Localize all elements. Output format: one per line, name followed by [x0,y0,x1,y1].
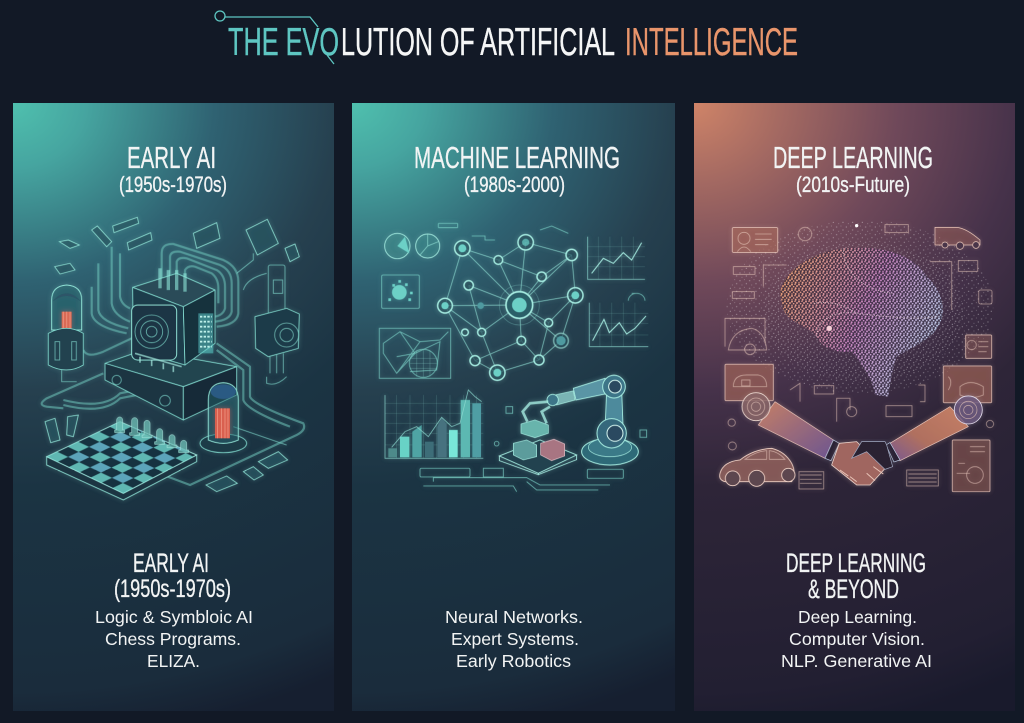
text block: deep learning summary: Computer Vision. [789,629,925,649]
heading: deep learning: (2010s-Future) [796,172,910,197]
icon: car [720,448,795,486]
icon: handshake [832,442,893,485]
robot arm: left [742,393,839,461]
heading: deep learning [773,140,933,197]
icon: van [935,227,980,249]
illustration: neural network, charts and robot arm [379,223,648,492]
panel: deep learning [694,103,1015,711]
text block: deep learning summary: NLP. Generative AI [781,651,932,671]
heading: early AI: (1950s-1970s) [119,172,227,197]
base plinth [105,350,237,420]
illustration: isometric vintage computer with chessboard [42,217,304,500]
line chart: bottom [589,293,648,347]
text block: deep learning summary: & BEYOND [808,574,899,604]
text block: machine learning summary: Neural Networks. [445,607,583,627]
wires behind the machine [42,244,304,485]
title: LUTION OF ARTIFICIAL [341,21,615,64]
icon: pie charts [385,223,568,259]
panel: machine learning [352,103,675,711]
heading: machine learning: MACHINE LEARNING [414,140,620,175]
text block: early AI summary: Logic & Symbloic AI [95,607,253,627]
title: THE EVO [228,21,339,64]
scattered circuit components [45,217,299,492]
title: INTELLIGENCE [625,21,798,64]
illustration: digital brain and robot handshake [720,220,994,492]
icon: map with polygon mesh [379,328,451,378]
text block: deep learning summary: Deep Learning. [798,607,917,627]
neural network graph [438,235,583,380]
heading: machine learning: (1980s-2000) [464,172,565,197]
icon: sun diagram [382,275,419,308]
title [215,11,798,64]
heading: early AI: EARLY AI [127,140,216,175]
circuit labels below robot [420,407,647,492]
heading: deep learning: DEEP LEARNING [773,140,933,175]
heading: machine learning [414,140,620,197]
particle dust [727,220,993,393]
robot arm: right [886,396,982,462]
text block: early AI summary: (1950s-1970s) [114,575,231,603]
text block: machine learning summary: Expert Systems. [451,629,579,649]
text block: machine learning summary [445,607,583,671]
line chart: top [588,237,645,279]
info cards [725,228,992,492]
text block: deep learning summary [781,548,932,671]
chess pieces [115,417,189,453]
text block: early AI summary: EARLY AI [133,548,209,578]
panel: early AI [13,103,334,711]
icon: dotted brain [780,224,943,397]
text block: early AI summary: ELIZA. [147,651,200,671]
text block: early AI summary: Chess Programs. [105,629,241,649]
vacuum tube: left [48,285,83,370]
robot arm stacking cubes [499,375,638,475]
text block: deep learning summary: DEEP LEARNING [786,548,926,578]
text block: early AI summary [95,548,253,671]
main processor cube [132,268,215,372]
text block: machine learning summary: Early Robotics [456,651,571,671]
vacuum tube: right [200,383,247,453]
gauge module: right [255,265,299,373]
icon: circuit trace on title [215,11,334,64]
bar chart [385,390,483,458]
small outline elements [725,225,994,489]
heading: early AI [119,140,227,197]
chessboard [47,417,197,500]
